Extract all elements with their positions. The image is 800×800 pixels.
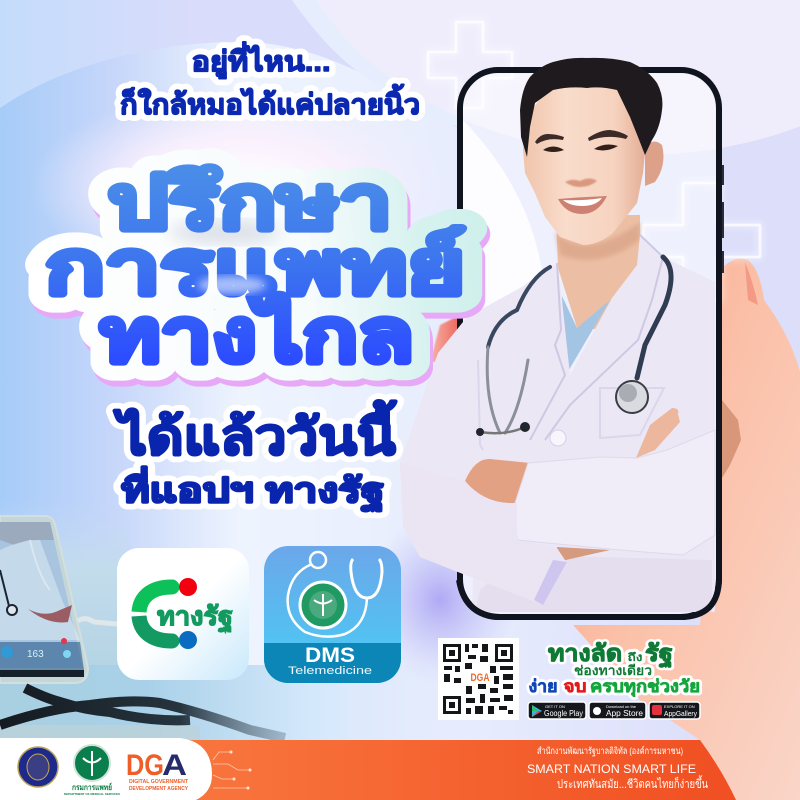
logo: Department of Medical Services (64, 745, 120, 796)
title white outline layer (45, 161, 465, 377)
title blue text layer (45, 161, 465, 377)
phone in photo: 163 (27, 649, 44, 660)
app icon: DMS Telemedicine (264, 546, 401, 683)
bottom-left telemedicine photo (0, 500, 480, 740)
subheading outline: ที่แอปฯ ทางรัฐ (122, 466, 384, 513)
tagline outline: ครบทุกช่วงวัย (590, 677, 700, 697)
coat lapels and shading (530, 235, 663, 440)
logo: Thai government seal (18, 747, 58, 787)
stethoscope (476, 257, 671, 436)
tagline outline: จบ (564, 677, 586, 696)
logo: DGA: A (162, 749, 187, 782)
badge: App Store (589, 702, 646, 719)
subheading (113, 400, 397, 513)
face (523, 84, 645, 245)
black stethoscope on desk (0, 688, 285, 738)
badge: AppGallery (649, 702, 700, 719)
phone frame (460, 70, 724, 617)
white coat (400, 235, 715, 612)
neck (556, 215, 658, 330)
title shadow layer: ทางไกล (103, 298, 417, 383)
hand holding phone (430, 259, 800, 800)
tagline outline: รัฐ (645, 640, 673, 668)
logo: DGA: DEVELOPMENT AGENCY (129, 786, 189, 792)
intro text: อยู่ที่ไหน... (192, 41, 330, 79)
crossed sleeve (515, 430, 715, 555)
charger cable (78, 619, 117, 624)
app icon: Tang Rat (117, 548, 249, 680)
footer text: สำนักงานพัฒนารัฐบาลดิจิทัล (องค์การมหาชน) (537, 745, 683, 757)
eyes (543, 145, 618, 152)
title white outline layer: การแพทย์ (45, 226, 465, 309)
subheading outline (113, 400, 397, 513)
intro outline (120, 41, 420, 120)
badge: Google Play: GET IT ON (545, 704, 565, 709)
phone screen (463, 120, 716, 614)
badge: Google Play (528, 702, 586, 719)
app icon: DMS Telemedicine: DMS (305, 644, 355, 667)
heading: intro (120, 41, 420, 120)
logo: DGA: DIGITAL GOVERNMENT (129, 779, 188, 785)
glowing plus decorations (428, 22, 760, 300)
badge: AppGallery: EXPLORE IT ON (664, 704, 695, 709)
QR code (438, 638, 519, 720)
logo: DGA: DG (126, 749, 164, 782)
title white outline layer: ปรึกษา (108, 161, 392, 244)
title shadow layer: ปรึกษา (111, 167, 395, 250)
tagline outline: ง่าย (528, 677, 558, 696)
nose (565, 178, 597, 187)
badge: App Store: App Store (606, 709, 644, 718)
QR code: DGA (470, 672, 490, 684)
tagline text: ครบทุกช่วงวัย (590, 677, 700, 697)
tagline text: รัฐ (645, 640, 673, 668)
title shadow layer: การแพทย์ (48, 232, 468, 315)
subheading text: ที่แอปฯ ทางรัฐ (122, 466, 384, 513)
title white outline layer: ทางไกล (100, 292, 414, 377)
forearms (465, 459, 530, 503)
tagline text: ง่าย (528, 677, 558, 696)
eyebrows (535, 130, 628, 144)
intro text: ก็ใกล้หมอได้แค่ปลายนิ้ว (120, 83, 420, 120)
phone in photo (0, 516, 88, 683)
chest piece (616, 381, 648, 413)
tagline outline: ถึง (627, 651, 642, 664)
subheading text: ได้แล้ววันนี้ (113, 400, 397, 465)
scrubs (562, 296, 610, 375)
intro outline: อยู่ที่ไหน... (192, 41, 330, 79)
title gloss (198, 276, 266, 294)
tagline outline: ทางลัด (548, 640, 622, 666)
app icon: Tang Rat: ทางรัฐ (157, 601, 233, 634)
intro text (120, 41, 420, 120)
title shadow layer (48, 167, 468, 383)
smile (558, 196, 607, 214)
tagline text: ช่องทางเดียว (574, 663, 652, 678)
subheading text (113, 400, 397, 513)
logo: Department of Medical Services: DEPARTMENT OF MEDICAL SERVICES (64, 792, 120, 796)
tagline text (528, 640, 700, 697)
phone edge over doctor (459, 120, 719, 617)
badge: Google Play: Google Play (544, 709, 583, 718)
subheading outline: ได้แล้ววันนี้ (113, 400, 397, 465)
footer text (527, 745, 708, 791)
intro outline: ก็ใกล้หมอได้แค่ปลายนิ้ว (120, 83, 420, 120)
tagline text: ทางลัด (548, 640, 622, 666)
hair (520, 58, 662, 157)
tagline text: ถึง (627, 651, 642, 664)
badge: AppGallery: AppGallery (664, 709, 697, 718)
title blue text layer: การแพทย์ (45, 226, 465, 309)
store badges (528, 702, 700, 719)
title blue text layer: ทางไกล (100, 292, 414, 377)
tagline text: จบ (564, 677, 586, 696)
logo: DGA (126, 749, 189, 792)
tagline outline (528, 640, 700, 697)
logo: Department of Medical Services: กรมการแพทย์ (72, 782, 112, 792)
footer text: ประเทศทันสมัย...ชีวิตคนไทยก็ง่ายขึ้น (557, 775, 708, 791)
sticker grey sheen (170, 220, 280, 244)
main title sticker (45, 161, 468, 383)
footer text: SMART NATION SMART LIFE (527, 762, 696, 776)
ear (645, 141, 663, 186)
white logo panel (0, 738, 212, 800)
title blue text layer: ปรึกษา (108, 161, 392, 244)
footer circuit lines (213, 751, 251, 789)
app icon: DMS Telemedicine: Telemedicine (288, 665, 372, 677)
tagline outline: ช่องทางเดียว (574, 663, 652, 678)
tagline block (528, 640, 700, 697)
footer band (0, 738, 736, 800)
badge: App Store: Download on the (606, 704, 637, 709)
doctor (400, 58, 715, 612)
